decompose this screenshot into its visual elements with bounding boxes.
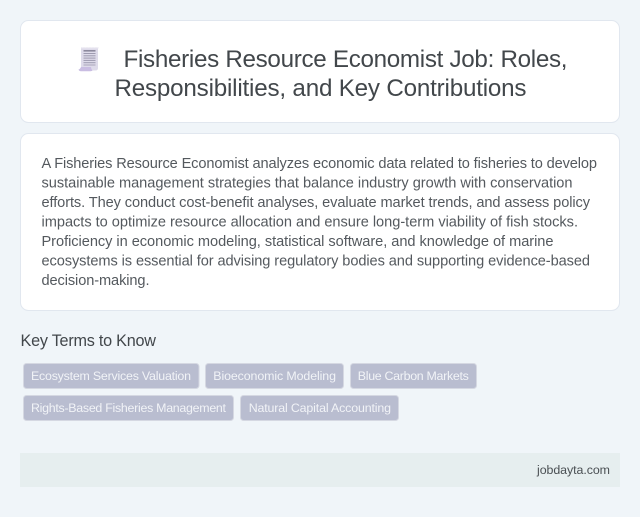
description text: impacts to optimize resource allocation and ensure long-term viability of fish stocks.: [42, 214, 578, 230]
panel: description: [20, 134, 620, 310]
tag: Blue Carbon Markets: [350, 364, 476, 388]
tag: Rights-Based Fisheries Management: Rights-Based Fisheries Management: [31, 401, 227, 415]
title: Fisheries Resource Economist Job: Roles,: [124, 46, 568, 73]
tag: Rights-Based Fisheries Management: [24, 396, 234, 420]
title: [114, 46, 568, 102]
tag: Bioeconomic Modeling: [206, 364, 344, 388]
tag: Natural Capital Accounting: Natural Capital Accounting: [249, 401, 391, 415]
tag: Blue Carbon Markets: Blue Carbon Markets: [358, 369, 469, 383]
panel: header: [20, 20, 620, 122]
footer site name: jobdayta.com: [536, 463, 610, 477]
heading: key terms: Key Terms to Know: [20, 332, 156, 350]
icon: receipt scroll: [78, 47, 98, 71]
description text: [42, 156, 597, 289]
description text: efforts. They conduct cost-benefit analyses, evaluate market trends, and assess policy: [42, 195, 591, 211]
tag: Ecosystem Services Valuation: Ecosystem Services Valuation: [31, 369, 191, 383]
description text: sustainable management strategies that balance industry growth with conservation: [42, 176, 572, 192]
tag: Bioeconomic Modeling: Bioeconomic Modeling: [213, 369, 336, 383]
description text: Proficiency in economic modeling, statistical software, and knowledge of marine: [42, 234, 554, 250]
tag: Natural Capital Accounting: [240, 396, 398, 420]
title: Responsibilities, and Key Contributions: [114, 75, 526, 102]
description text: ecosystems is essential for advising regulatory bodies and supporting evidence-based: [42, 254, 590, 270]
description text: A Fisheries Resource Economist analyzes economic data related to fisheries to develop: [42, 156, 597, 172]
description text: decision-making.: [42, 273, 150, 289]
tag: Ecosystem Services Valuation: [24, 364, 199, 388]
footer band: [20, 453, 620, 487]
